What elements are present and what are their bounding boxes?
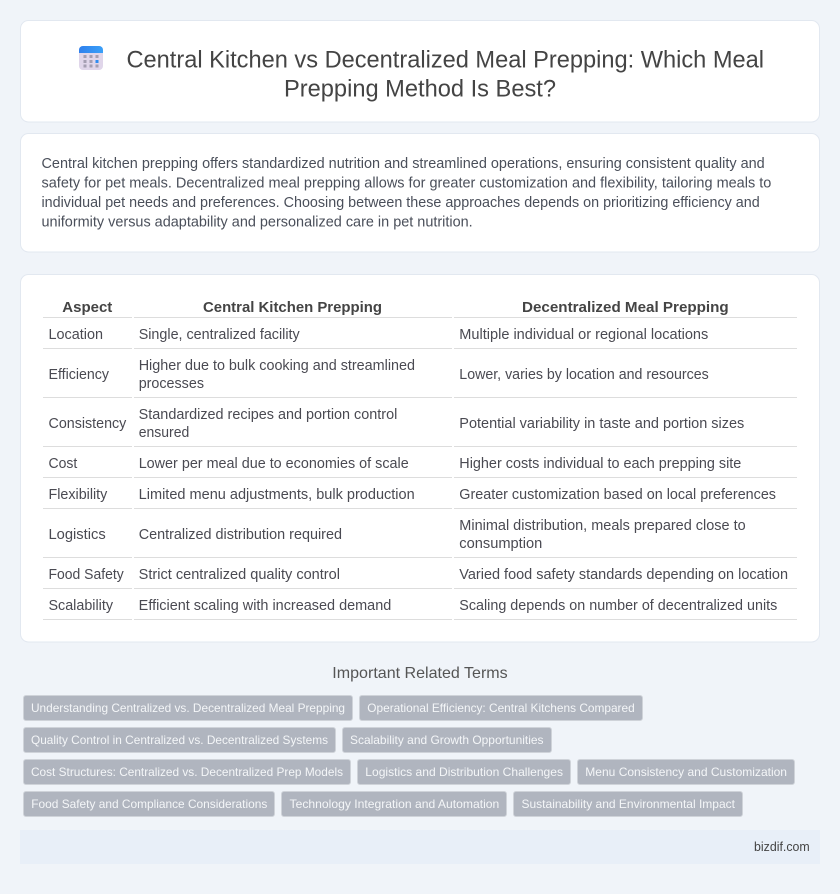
row: cost <box>43 456 797 478</box>
footer <box>20 830 820 864</box>
summary paragraph: uniformity versus adaptability and personalized care in pet nutrition. <box>42 214 473 230</box>
tag <box>360 696 642 720</box>
panel: summary <box>20 134 820 252</box>
row: consistency: Standardized recipes and portion control <box>139 407 397 423</box>
tag <box>24 760 350 784</box>
row: efficiency <box>43 358 797 398</box>
row: consistency <box>43 407 797 447</box>
tag: Logistics and Distribution Challenges <box>365 765 563 779</box>
tag <box>24 792 274 816</box>
tag: Understanding Centralized vs. Decentralized Meal Prepping <box>31 701 345 715</box>
row: food safety <box>43 567 797 589</box>
row: logistics <box>43 518 797 558</box>
row: logistics: Minimal distribution, meals prepared close to <box>459 518 746 534</box>
row: scalability: Efficient scaling with increased demand <box>139 598 391 614</box>
tag <box>578 760 794 784</box>
tag: Cost Structures: Centralized vs. Decentralized Prep Models <box>31 765 343 779</box>
footer: bizdif.com <box>754 839 810 854</box>
tag <box>358 760 570 784</box>
tag: Menu Consistency and Customization <box>585 765 787 779</box>
row: logistics: Logistics <box>48 527 106 543</box>
row: efficiency: Lower, varies by location and resources <box>459 367 709 383</box>
row: cost: Higher costs individual to each prepping site <box>459 456 741 472</box>
row: logistics: Centralized distribution required <box>139 527 342 543</box>
summary paragraph: individual pet needs and preferences. Choosing between these approaches depends on prioritizing efficiency and <box>42 195 760 211</box>
tag <box>514 792 742 816</box>
panel: header <box>20 20 820 122</box>
tag <box>24 696 352 720</box>
tag <box>282 792 506 816</box>
table header row: Aspect <box>62 299 112 316</box>
row: food safety: Strict centralized quality control <box>139 567 340 583</box>
table header row: Decentralized Meal Prepping <box>522 299 729 316</box>
tag: Food Safety and Compliance Considerations <box>31 797 267 811</box>
row: location: Location <box>48 327 103 343</box>
tag: Quality Control in Centralized vs. Decentralized Systems <box>31 733 328 747</box>
panel: comparison table <box>20 274 820 642</box>
row: scalability: Scaling depends on number of decentralized units <box>459 598 777 614</box>
row: efficiency: Higher due to bulk cooking and streamlined <box>139 358 415 374</box>
tag: Scalability and Growth Opportunities <box>350 733 544 747</box>
tag <box>342 728 552 752</box>
row: consistency: Potential variability in taste and portion sizes <box>459 416 744 432</box>
row: flexibility: Flexibility <box>48 487 108 503</box>
summary paragraph: safety for pet meals. Decentralized meal prepping allows for greater customization and flexibility, tailoring meals to <box>42 176 771 192</box>
icon: calendar <box>79 46 103 70</box>
row: flexibility <box>43 487 797 509</box>
tag: Sustainability and Environmental Impact <box>522 797 736 811</box>
row: efficiency: processes <box>139 376 204 392</box>
row: location: Single, centralized facility <box>139 327 300 343</box>
row: food safety: Food Safety <box>48 567 124 583</box>
row: logistics: consumption <box>459 536 542 552</box>
title <box>126 46 764 102</box>
row: location: Multiple individual or regional locations <box>459 327 708 343</box>
row: scalability: Scalability <box>48 598 114 614</box>
row: food safety: Varied food safety standards depending on location <box>459 567 788 583</box>
related term tags <box>24 696 794 816</box>
title: Prepping Method Is Best? <box>284 76 556 102</box>
summary paragraph: Central kitchen prepping offers standardized nutrition and streamlined operations, ensuring consistent quality and <box>42 156 765 172</box>
heading: important related terms: Important Related Terms <box>332 665 508 682</box>
summary paragraph <box>42 156 771 230</box>
row: efficiency: Efficiency <box>48 367 110 383</box>
tag: Operational Efficiency: Central Kitchens Compared <box>367 701 635 715</box>
row: flexibility: Limited menu adjustments, bulk production <box>139 487 415 503</box>
row: scalability <box>43 598 797 620</box>
title: Central Kitchen vs Decentralized Meal Prepping: Which Meal <box>126 46 764 74</box>
row: location <box>43 327 797 349</box>
tag <box>24 728 336 752</box>
table header row: Central Kitchen Prepping <box>203 299 382 316</box>
row: consistency: ensured <box>139 425 189 441</box>
row: cost: Cost <box>48 456 77 472</box>
row: cost: Lower per meal due to economies of scale <box>139 456 409 472</box>
table header row <box>43 299 797 318</box>
row: consistency: Consistency <box>48 416 127 432</box>
row: flexibility: Greater customization based on local preferences <box>459 487 776 503</box>
tag: Technology Integration and Automation <box>290 797 499 811</box>
